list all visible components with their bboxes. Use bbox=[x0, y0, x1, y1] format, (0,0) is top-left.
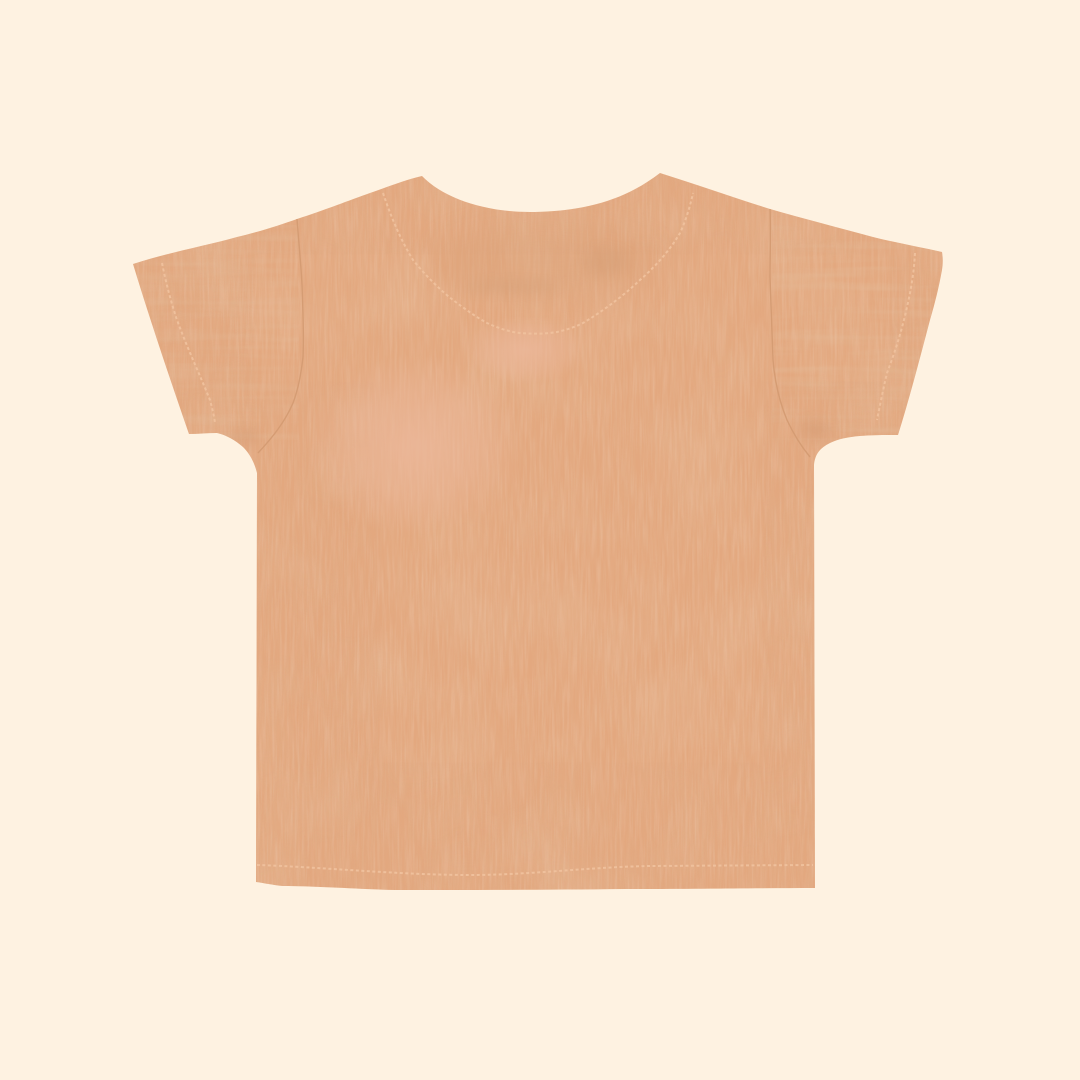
shirt body bbox=[120, 160, 960, 900]
sleeve seams bbox=[258, 209, 810, 457]
bottom hem stitching bbox=[257, 865, 813, 875]
sleeve hem stitching bbox=[162, 253, 915, 423]
neck yoke stitching bbox=[383, 193, 693, 334]
illustration: back view of a peach muslin t-shirt bbox=[133, 173, 943, 890]
